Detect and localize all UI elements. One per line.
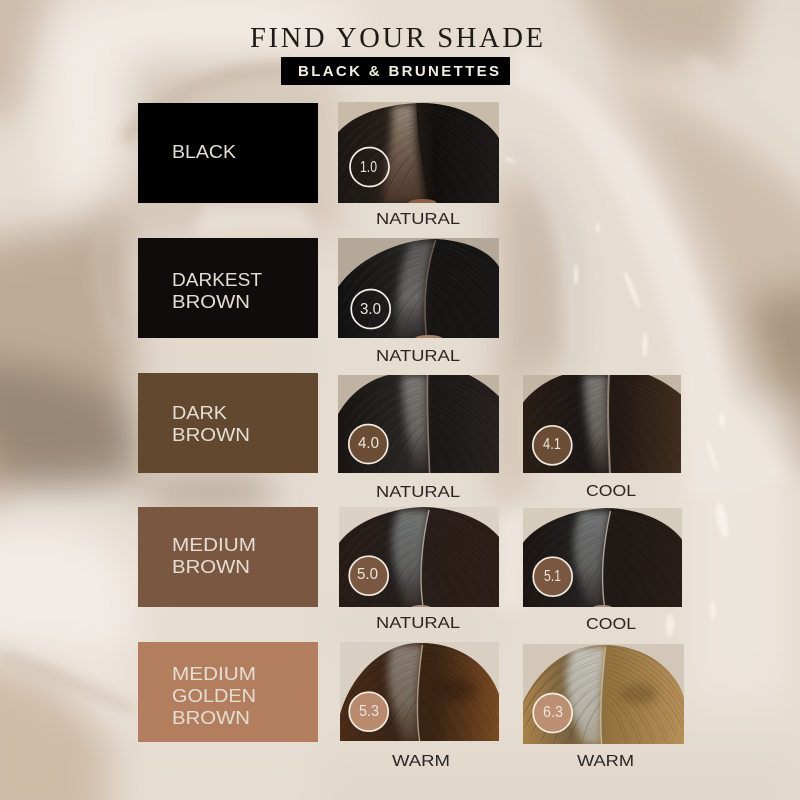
label: natural (5.0): NATURAL <box>376 615 460 632</box>
badge: 6.3 <box>533 694 572 732</box>
panel: black swatch <box>138 103 318 203</box>
panel: medium golden brown swatch <box>138 642 318 742</box>
panel: darkest brown swatch <box>138 238 318 338</box>
hair photo: shade 5.1 <box>523 508 682 607</box>
badge: 4.1 <box>533 426 572 465</box>
panel: medium brown swatch: MEDIUM <box>172 534 256 555</box>
badge: 6.3: 6.3 <box>543 704 563 721</box>
hair photo: shade 4.0 <box>338 375 499 473</box>
panel: dark brown swatch: DARK <box>172 402 228 423</box>
badge: 5.1: 5.1 <box>544 568 561 585</box>
badge: 4.1: 4.1 <box>543 436 561 453</box>
label: cool (4.1): COOL <box>586 483 636 500</box>
label: warm (5.3): WARM <box>392 753 450 770</box>
hair photo: shade 5.0 <box>339 507 499 607</box>
badge: 1.0 <box>350 148 389 186</box>
panel: medium golden brown swatch: BROWN <box>172 707 250 728</box>
hair photo: shade 3.0 <box>338 238 499 338</box>
hair photo: shade 1.0 <box>338 102 499 203</box>
badge: 5.1 <box>533 557 572 596</box>
badge: 5.0 <box>349 556 388 595</box>
badge: 1.0: 1.0 <box>360 159 377 176</box>
badge: 5.3 <box>349 692 388 731</box>
badge: 3.0: 3.0 <box>360 301 381 318</box>
badge: 4.0 <box>349 424 388 464</box>
panel: medium brown swatch: BROWN <box>172 556 250 577</box>
badge: 4.0: 4.0 <box>358 435 379 452</box>
panel: darkest brown swatch: DARKEST <box>172 269 262 290</box>
subtitle banner <box>281 57 510 85</box>
title: FIND YOUR SHADE <box>250 23 543 54</box>
badge: 5.3: 5.3 <box>359 703 379 720</box>
label: warm (6.3): WARM <box>577 753 634 770</box>
panel: medium brown swatch <box>138 507 318 607</box>
label: natural (1.0): NATURAL <box>376 211 460 228</box>
label: natural (4.0): NATURAL <box>376 484 460 501</box>
hair photo: shade 6.3 <box>523 644 684 744</box>
panel: darkest brown swatch: BROWN <box>172 291 250 312</box>
badge: 5.0: 5.0 <box>357 566 378 583</box>
label: natural (3.0): NATURAL <box>376 348 460 365</box>
panel: medium golden brown swatch: GOLDEN <box>172 685 256 706</box>
badge: 3.0 <box>351 290 390 328</box>
subtitle banner: BLACK & BRUNETTES <box>298 63 499 80</box>
panel: black swatch: BLACK <box>172 141 237 162</box>
hair photo: shade 4.1 <box>523 375 681 473</box>
panel: dark brown swatch: BROWN <box>172 424 250 445</box>
label: cool (5.1): COOL <box>586 616 636 633</box>
panel: dark brown swatch <box>138 373 318 473</box>
panel: medium golden brown swatch: MEDIUM <box>172 663 256 684</box>
hair photo: shade 5.3 <box>340 642 499 741</box>
